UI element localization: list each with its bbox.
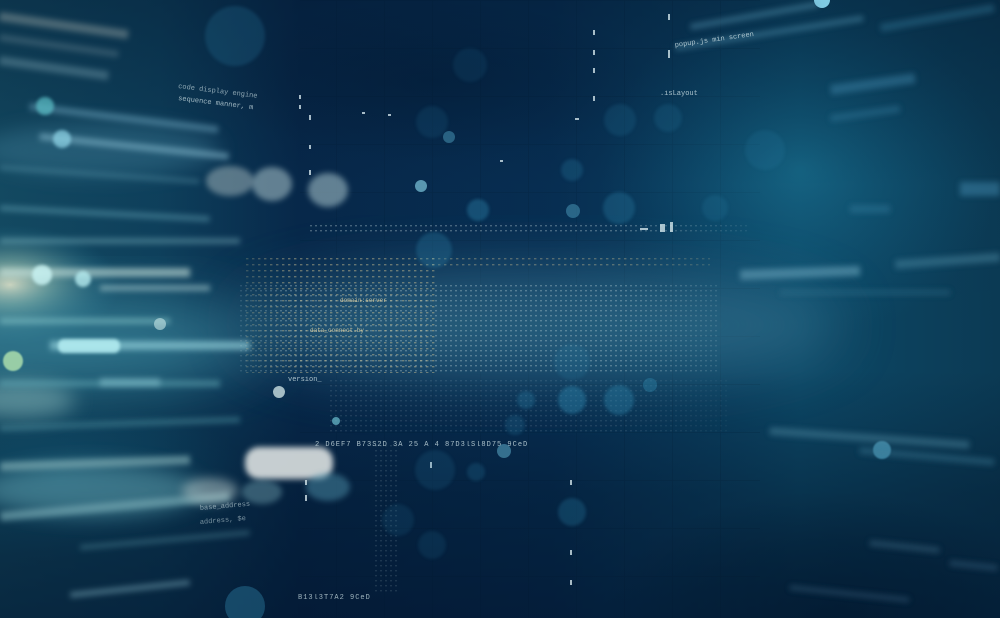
code text fragments: data_connect.by	[310, 327, 364, 334]
code text fragments: version_	[288, 376, 322, 384]
bokeh circles	[154, 6, 785, 618]
code text fragments: popup.js min screen	[674, 31, 754, 50]
left blurred streaks	[0, 12, 250, 598]
code text fragments: B13l3T7A2 9CeD	[298, 594, 371, 602]
centre data band of dots	[240, 224, 750, 435]
bright patches	[3, 0, 891, 504]
code text fragments: base_address	[200, 501, 250, 513]
code text fragments: sequence manner, m	[178, 95, 254, 112]
left light bloom	[0, 124, 260, 516]
right blurred streaks	[675, 1, 1000, 603]
vertical dashes	[299, 14, 673, 585]
code text fragments: code display engine	[178, 83, 258, 101]
code text fragments: domain:server	[340, 297, 387, 304]
code text fragments: address, $e	[200, 515, 246, 527]
code text fragments	[178, 31, 754, 602]
lower vertical dot column	[375, 445, 400, 595]
code text fragments: 2 D6EF7 B73S2D 3A 25 A 4 87D3lSl8D75 9CeD	[315, 441, 528, 449]
code text fragments: .isLayout	[660, 90, 698, 98]
